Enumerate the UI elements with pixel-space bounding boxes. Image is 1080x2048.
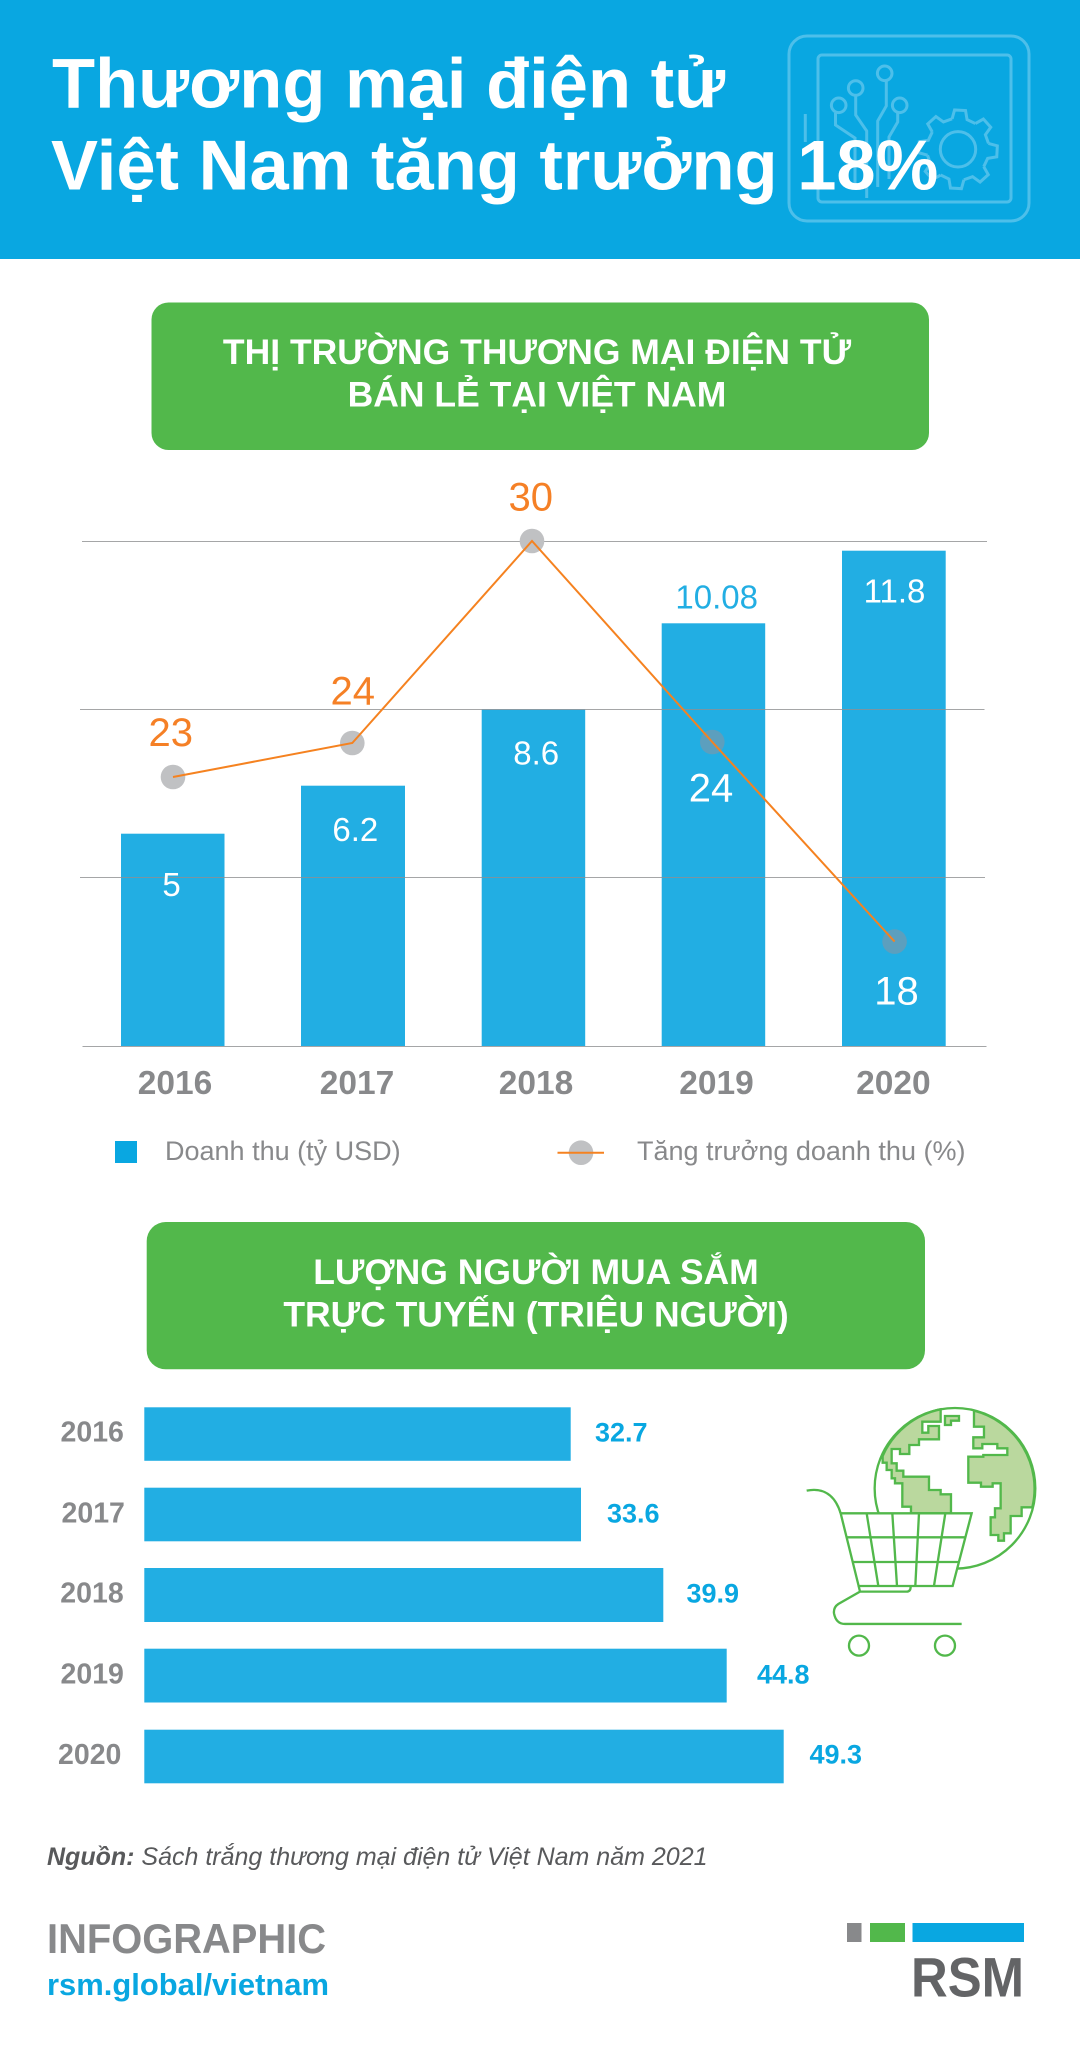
year axis: 2016 (138, 1065, 212, 1102)
revenue labels: 11.8 (864, 573, 925, 610)
growth markers (161, 529, 907, 954)
RSM logo: RSM (911, 1946, 1024, 2009)
value labels: 32.7 (595, 1418, 648, 1448)
year labels: 2016 (60, 1417, 124, 1449)
value labels (595, 1418, 862, 1769)
year labels: 2019 (60, 1658, 124, 1690)
bars (144, 1407, 784, 1783)
year axis: 2019 (679, 1065, 754, 1102)
revenue labels: 8.6 (513, 734, 559, 771)
heading: retail e-commerce market (152, 302, 929, 450)
heading: retail e-commerce market: THỊ TRƯỜNG THƯƠNG MẠI ĐIỆN TỬ (223, 332, 852, 372)
combo chart: revenue bars and growth line (80, 476, 987, 1102)
growth labels: 23 (149, 711, 193, 755)
year labels: 2020 (58, 1739, 121, 1771)
year axis: 2017 (320, 1065, 394, 1102)
legend: growth: Tăng trưởng doanh thu (%) (637, 1136, 965, 1166)
value labels: 33.6 (607, 1498, 660, 1528)
heading: online shoppers: TRỰC TUYẾN (TRIỆU NGƯỜI) (283, 1295, 789, 1335)
heading: online shoppers: LƯỢNG NGƯỜI MUA SẮM (313, 1252, 759, 1292)
value labels: 39.9 (686, 1579, 739, 1609)
cart (807, 1490, 972, 1656)
title (51, 44, 938, 204)
icon: shopping cart with globe (807, 1408, 1035, 1656)
growth line (173, 541, 895, 942)
year labels (58, 1417, 125, 1771)
RSM logo (847, 1923, 1024, 2009)
icon: circuit board and gear (789, 36, 1029, 221)
globe (875, 1408, 1035, 1569)
growth labels: 24 (689, 767, 733, 811)
heading: online shoppers (147, 1222, 925, 1369)
bars: revenue (121, 551, 946, 1046)
legend (115, 1136, 965, 1166)
footer brand text: INFOGRAPHIC (47, 1915, 326, 1962)
legend: revenue: Doanh thu (tỷ USD) (165, 1136, 401, 1166)
year axis: 2018 (499, 1065, 573, 1102)
header banner (0, 0, 1080, 259)
value labels: 44.8 (757, 1659, 810, 1689)
growth labels: 24 (331, 669, 375, 713)
year axis: 2020 (856, 1065, 931, 1102)
year labels: 2017 (62, 1497, 125, 1529)
title: Việt Nam tăng trưởng 18% (51, 126, 938, 204)
footer brand text: rsm.global/vietnam (47, 1967, 329, 2002)
growth labels: 30 (509, 476, 553, 520)
growth labels: 18 (874, 970, 919, 1014)
value labels: 49.3 (810, 1739, 862, 1769)
growth labels (149, 476, 919, 1014)
revenue labels: 6.2 (332, 811, 378, 848)
footer brand text (47, 1915, 329, 2002)
year labels: 2018 (60, 1578, 124, 1610)
revenue labels: 5 (162, 866, 181, 903)
source note: Nguồn: Sách trắng thương mại điện tử Việt Nam năm 2021 (47, 1842, 708, 1871)
year axis (138, 1065, 931, 1102)
heading: retail e-commerce market: BÁN LẺ TẠI VIỆT NAM (348, 375, 726, 415)
revenue labels: 10.08 (675, 578, 758, 615)
revenue labels (162, 573, 925, 903)
horizontal bar chart: online shoppers (58, 1407, 862, 1783)
title: Thương mại điện tử (52, 44, 726, 122)
